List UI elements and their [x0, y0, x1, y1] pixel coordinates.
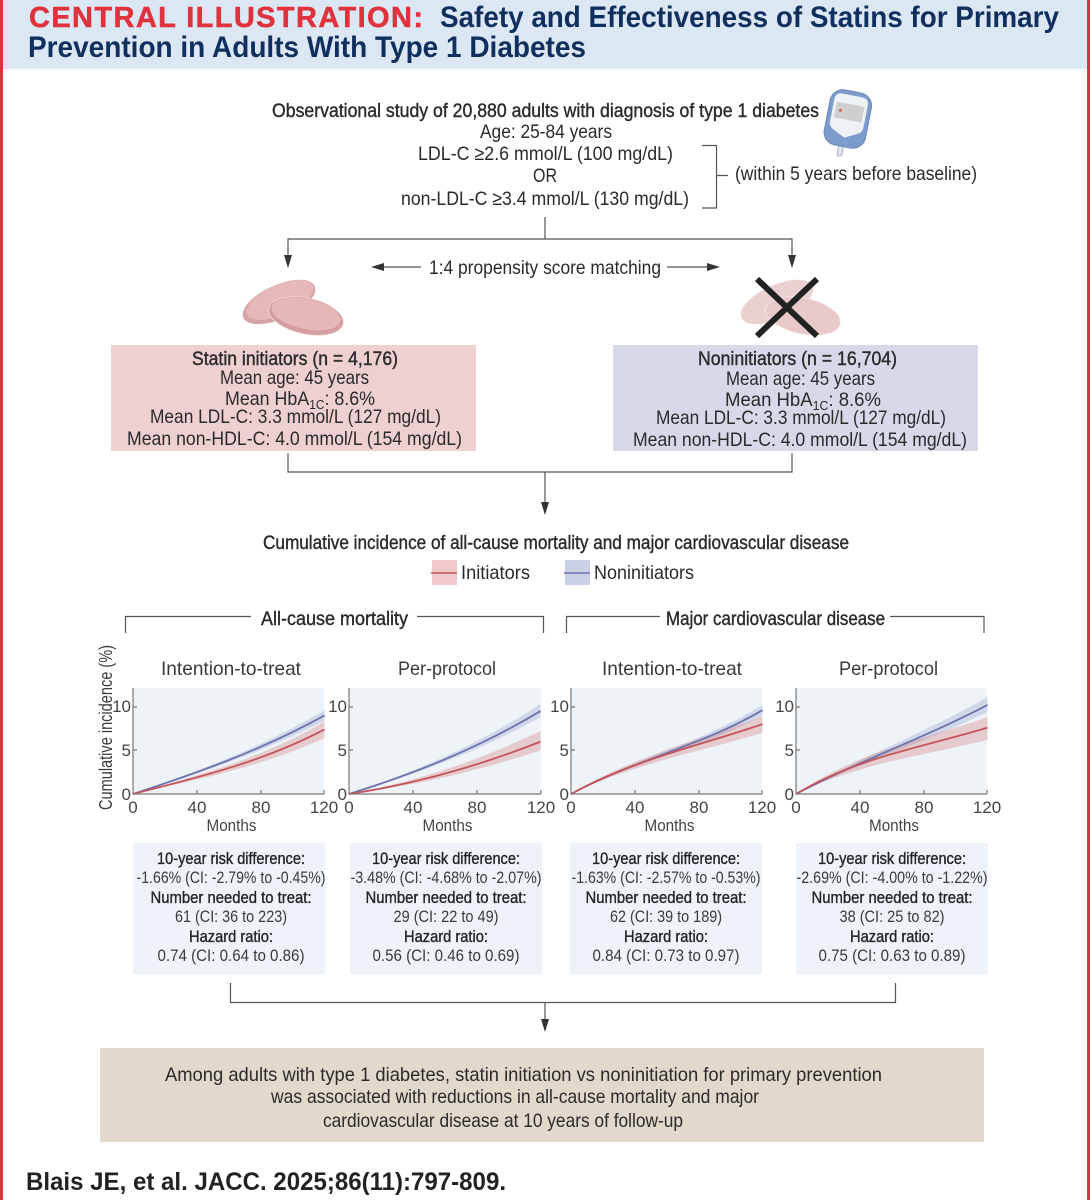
chart: major cardiovascular disease, per-protocol: 0 — [785, 785, 794, 804]
panel: statin initiators: 1C — [309, 397, 324, 412]
chart: all-cause mortality, intention-to-treat: 5 — [122, 741, 131, 760]
panel: statin initiators — [111, 345, 476, 451]
chart: major cardiovascular disease, per-protocol: 5 — [785, 741, 794, 760]
chart: major cardiovascular disease, intention-to-treat: 80 — [690, 798, 708, 817]
stats panel: all-cause mortality, per-protocol: -3.48% (CI: -4.68% to -2.07%) — [350, 868, 542, 887]
study population text — [272, 100, 819, 210]
conclusion connector arrow — [230, 983, 896, 1032]
bracket: time window: (within 5 years before baseline) — [735, 163, 977, 185]
chart: major cardiovascular disease, per-protocol: 80 — [915, 798, 933, 817]
section header: all-cause mortality: All-cause mortality — [261, 608, 408, 630]
chart: all-cause mortality, per-protocol: Per-protocol — [398, 658, 496, 680]
study population text: LDL-C ≥2.6 mmol/L (100 mg/dL) — [418, 143, 673, 165]
stats panel: all-cause mortality, per-protocol: 29 (CI: 22 to 49) — [394, 907, 498, 926]
stats panel: all-cause mortality, per-protocol: 0.56 (CI: 0.46 to 0.69) — [372, 946, 520, 965]
chart: all-cause mortality, intention-to-treat: Intention-to-treat — [161, 658, 302, 680]
icon: statin pills — [236, 271, 347, 342]
chart: major cardiovascular disease, per-protocol: 0 — [791, 798, 801, 817]
chart: all-cause mortality, per-protocol: 80 — [468, 798, 486, 817]
legend: Noninitiators — [594, 562, 694, 584]
chart: major cardiovascular disease, intention-to-treat: 0 — [560, 785, 569, 804]
stats panel: all-cause mortality, per-protocol — [350, 843, 542, 974]
stats panel: all-cause mortality, intention-to-treat: Number needed to treat: — [150, 888, 312, 907]
stats panel: all-cause mortality, intention-to-treat — [133, 843, 326, 974]
merge connector arrow — [288, 453, 792, 515]
flow split connector with arrows — [284, 217, 796, 268]
stats panel: major CVD, per-protocol: Hazard ratio: — [850, 927, 934, 946]
panel: noninitiators: 1C — [813, 398, 828, 413]
section header: all-cause mortality — [126, 608, 544, 633]
panel: statin initiators: Mean non-HDL-C: 4.0 mmol/L (154 mg/dL) — [127, 428, 462, 450]
bracket: time window — [702, 146, 977, 208]
stats panel: major CVD, per-protocol — [796, 843, 988, 974]
chart: all-cause mortality, per-protocol — [328, 658, 555, 835]
conclusion box: was associated with reductions in all-cause mortality and major — [270, 1086, 759, 1108]
stats panel: all-cause mortality, intention-to-treat: Hazard ratio: — [189, 927, 273, 946]
chart: major cardiovascular disease, per-protocol — [775, 658, 1001, 835]
title band: Prevention in Adults With Type 1 Diabetes — [28, 31, 586, 64]
title band — [3, 0, 1087, 69]
stats panel: major CVD, per-protocol: 38 (CI: 25 to 82) — [840, 907, 944, 926]
y-axis label: Cumulative incidence (%) — [95, 645, 116, 810]
section header: major cardiovascular disease — [566, 608, 984, 633]
stats panel: major CVD, intention-to-treat: Hazard ratio: — [624, 927, 708, 946]
stats panel: all-cause mortality, intention-to-treat: 61 (CI: 36 to 223) — [175, 907, 287, 926]
stats panel: major CVD, intention-to-treat: Number needed to treat: — [586, 888, 746, 907]
stats panel: major CVD, per-protocol: Number needed to treat: — [812, 888, 972, 907]
chart: major cardiovascular disease, intention-to-treat: 40 — [626, 798, 644, 817]
chart: major cardiovascular disease, per-protocol: Per-protocol — [839, 658, 938, 680]
stats panel: all-cause mortality, intention-to-treat: -1.66% (CI: -2.79% to -0.45%) — [136, 868, 326, 887]
propensity score matching label: 1:4 propensity score matching — [429, 257, 661, 279]
conclusion box: Among adults with type 1 diabetes, statin initiation vs noninitiation for primary prevention — [165, 1064, 882, 1086]
chart: all-cause mortality, intention-to-treat: 80 — [252, 798, 270, 817]
chart: all-cause mortality, per-protocol: 10 — [328, 697, 347, 716]
chart: major cardiovascular disease, per-protocol: 120 — [973, 798, 1001, 817]
chart: all-cause mortality, intention-to-treat: 40 — [188, 798, 206, 817]
conclusion box: cardiovascular disease at 10 years of follow-up — [323, 1110, 683, 1132]
stats panel: all-cause mortality, intention-to-treat: 0.74 (CI: 0.64 to 0.86) — [158, 946, 304, 965]
panel: noninitiators — [613, 345, 978, 451]
chart: all-cause mortality, per-protocol: 0 — [338, 785, 347, 804]
stats panel: major CVD, per-protocol: -2.69% (CI: -4.00% to -1.22%) — [796, 868, 988, 887]
chart: all-cause mortality, per-protocol: 120 — [527, 798, 555, 817]
chart: all-cause mortality, intention-to-treat: 0 — [128, 798, 138, 817]
stats panel: major CVD, intention-to-treat — [570, 843, 762, 974]
chart: major cardiovascular disease, intention-to-treat — [550, 658, 776, 835]
stats panel: major CVD, per-protocol: 0.75 (CI: 0.63 to 0.89) — [818, 946, 966, 965]
stats panel: major CVD, intention-to-treat: -1.63% (CI: -2.57% to -0.53%) — [572, 868, 760, 887]
chart: all-cause mortality, intention-to-treat: 0 — [122, 785, 131, 804]
heading: cumulative incidence: Cumulative incidence of all-cause mortality and major cardiovascular disease — [263, 532, 849, 554]
panel: statin initiators: Mean age: 45 years — [220, 367, 369, 389]
study population text: Age: 25-84 years — [480, 121, 612, 143]
chart: all-cause mortality, intention-to-treat — [112, 658, 338, 835]
legend — [431, 560, 694, 585]
study population text: Observational study of 20,880 adults with diagnosis of type 1 diabetes — [272, 100, 819, 122]
section header: major cardiovascular disease: Major cardiovascular disease — [666, 608, 885, 630]
chart: major cardiovascular disease, per-protocol: 10 — [775, 697, 794, 716]
stats panel: major CVD, intention-to-treat: 62 (CI: 39 to 189) — [610, 907, 722, 926]
chart: all-cause mortality, intention-to-treat: 120 — [310, 798, 338, 817]
panel: noninitiators: Mean non-HDL-C: 4.0 mmol/L (154 mg/dL) — [633, 429, 967, 451]
panel: statin initiators: : 8.6% — [324, 388, 375, 410]
chart: major cardiovascular disease, intention-to-treat: 0 — [566, 798, 576, 817]
stats panel: major CVD, intention-to-treat: 10-year risk difference: — [592, 849, 740, 868]
panel: statin initiators: Statin initiators (n = 4,176) — [192, 348, 398, 370]
chart: all-cause mortality, per-protocol: 40 — [404, 798, 422, 817]
icon: glucose meter — [820, 87, 874, 160]
panel: noninitiators: : 8.6% — [828, 389, 881, 411]
title band: Safety and Effectiveness of Statins for Primary — [440, 1, 1059, 34]
panel: noninitiators: Mean age: 45 years — [726, 368, 875, 390]
stats panel: all-cause mortality, per-protocol: Number needed to treat: — [366, 888, 526, 907]
chart: all-cause mortality, per-protocol: 5 — [338, 741, 347, 760]
panel: statin initiators: Mean LDL-C: 3.3 mmol/L (127 mg/dL) — [150, 406, 441, 428]
title band: CENTRAL ILLUSTRATION: — [29, 2, 423, 34]
legend: Initiators — [461, 562, 530, 584]
study population text: non-LDL-C ≥3.4 mmol/L (130 mg/dL) — [401, 188, 689, 210]
panel: noninitiators: Mean LDL-C: 3.3 mmol/L (127 mg/dL) — [656, 407, 946, 429]
stats panel: all-cause mortality, per-protocol: Hazard ratio: — [404, 927, 488, 946]
panel: noninitiators: Mean HbA — [725, 389, 817, 411]
panel: statin initiators: Mean HbA — [225, 388, 317, 410]
chart: major cardiovascular disease, intention-to-treat: Intention-to-treat — [602, 658, 743, 680]
chart: major cardiovascular disease, intention-to-treat: 10 — [550, 697, 569, 716]
chart: major cardiovascular disease, intention-to-treat: 120 — [748, 798, 776, 817]
stats panel: all-cause mortality, per-protocol: 10-year risk difference: — [372, 849, 520, 868]
panel: noninitiators: Noninitiators (n = 16,704) — [698, 348, 897, 370]
chart: major cardiovascular disease, per-protocol: 40 — [851, 798, 869, 817]
chart: all-cause mortality, per-protocol: 0 — [344, 798, 354, 817]
icon: crossed-out pills — [734, 271, 844, 342]
stats panel: all-cause mortality, intention-to-treat: 10-year risk difference: — [157, 849, 305, 868]
conclusion box — [100, 1048, 984, 1142]
stats panel: major CVD, intention-to-treat: 0.84 (CI: 0.73 to 0.97) — [592, 946, 740, 965]
citation: Blais JE, et al. JACC. 2025;86(11):797-809. — [26, 1168, 506, 1196]
chart: major cardiovascular disease, intention-to-treat: Months — [644, 816, 694, 835]
chart: all-cause mortality, intention-to-treat: 10 — [112, 697, 131, 716]
stats panel: major CVD, per-protocol: 10-year risk difference: — [818, 849, 966, 868]
chart: major cardiovascular disease, intention-to-treat: 5 — [560, 741, 569, 760]
study population text: OR — [533, 165, 557, 187]
chart: all-cause mortality, per-protocol: Months — [422, 816, 472, 835]
chart: all-cause mortality, intention-to-treat: Months — [206, 816, 256, 835]
chart: major cardiovascular disease, per-protocol: Months — [869, 816, 919, 835]
